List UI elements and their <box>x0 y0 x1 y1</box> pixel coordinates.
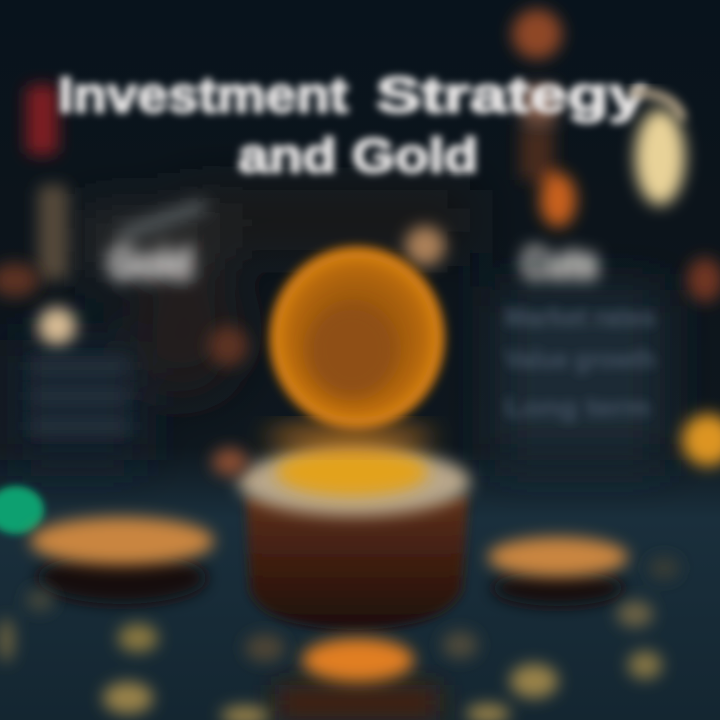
background haze panels <box>15 190 665 460</box>
right panel text lines: Long term <box>505 392 650 422</box>
left panel heading: Gold <box>108 239 193 288</box>
right orange column <box>520 85 720 302</box>
left red and cream candlestick column <box>0 85 76 345</box>
right panel heading: Cuts <box>522 239 598 288</box>
right edge glow <box>682 414 720 466</box>
top orange sphere <box>512 9 562 59</box>
left panel text lines <box>30 360 130 432</box>
central cup <box>212 428 470 630</box>
central gold coin <box>269 246 445 430</box>
right glowing lamp <box>630 92 685 205</box>
right panel text lines: Value growth <box>505 344 655 374</box>
green badge <box>0 486 44 534</box>
cup base glow <box>275 638 440 720</box>
left panel heading <box>108 205 205 288</box>
title: Strategy <box>376 67 646 123</box>
title: Investment <box>58 67 348 123</box>
scattered gold coins <box>0 557 679 720</box>
title: and Gold <box>238 130 478 183</box>
small glowing dots near coin <box>208 226 445 366</box>
right panel text lines: Market rates <box>505 302 655 332</box>
right panel text lines <box>505 302 655 422</box>
right dish <box>488 537 628 606</box>
title <box>58 67 646 183</box>
left dish <box>30 517 214 604</box>
